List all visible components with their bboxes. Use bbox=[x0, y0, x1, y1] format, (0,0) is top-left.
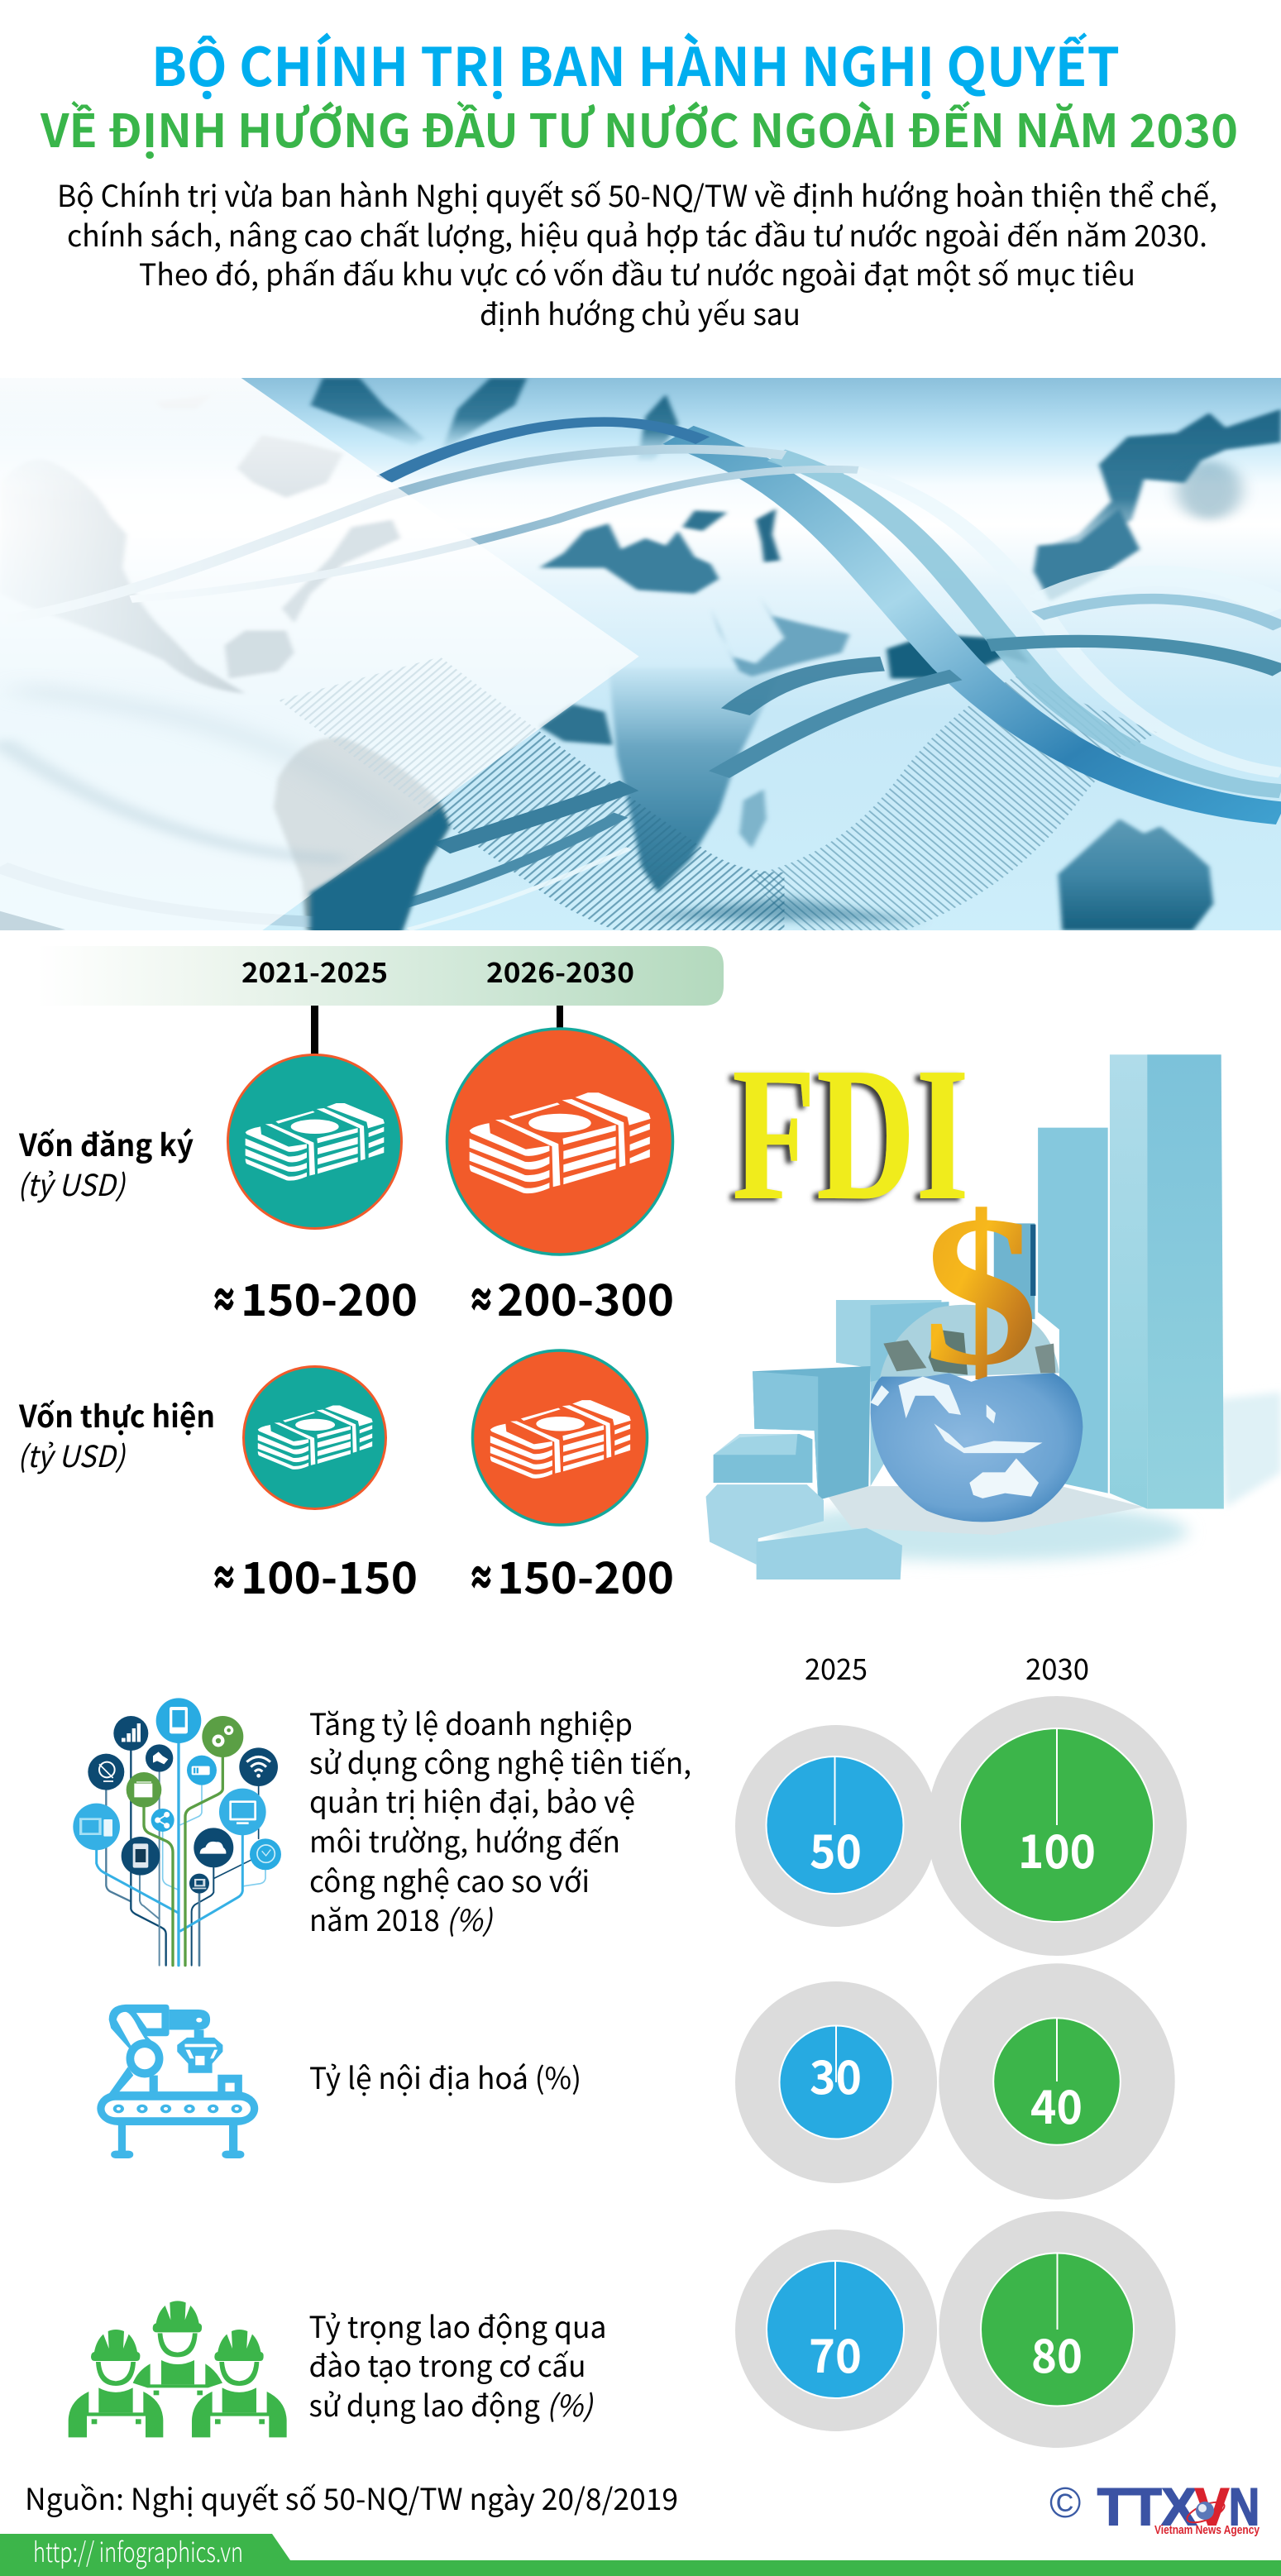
text: technology target: công nghệ cao so với bbox=[309, 1858, 590, 1901]
header band with periods bbox=[37, 946, 724, 1006]
ribbons bbox=[678, 435, 1281, 813]
donut: 50 in 2025 bbox=[735, 1725, 937, 1927]
text: technology target: Tăng tỷ lệ doanh nghiệp bbox=[309, 1701, 633, 1744]
period label 2021-2025: 2021-2025 bbox=[241, 951, 388, 991]
FDI yellow lettering: FDI bbox=[732, 1028, 969, 1240]
logo: TTXVN bbox=[1097, 2478, 1260, 2537]
text: trained labour share: sử dụng lao động (%) bbox=[309, 2382, 594, 2425]
circle: disbursed capital 2021-2025 bbox=[243, 1366, 385, 1508]
donut: 100 in 2030 bbox=[927, 1696, 1187, 1956]
source note: Nguồn: Nghị quyết số 50-NQ/TW ngày 20/8/2019 bbox=[25, 2476, 678, 2519]
white diamond overlay bbox=[0, 372, 639, 937]
footer url: http:// infographics.vn bbox=[33, 2531, 243, 2570]
worker: right bbox=[192, 2330, 287, 2437]
text: trained labour share: đào tạo trong cơ cấu bbox=[309, 2343, 586, 2386]
row label: von dang ky: Vốn đăng ký bbox=[18, 1121, 194, 1165]
text: trained labour share: Tỷ trọng lao động qua bbox=[309, 2304, 607, 2347]
text: localization rate: Tỷ lệ nội địa hoá (%) bbox=[309, 2055, 581, 2098]
title line 1: BỘ CHÍNH TRỊ BAN HÀNH NGHỊ QUYẾT bbox=[151, 26, 1120, 102]
title line 2: VỀ ĐỊNH HƯỚNG ĐẦU TƯ NƯỚC NGOÀI ĐẾN NĂM 2030 bbox=[40, 94, 1238, 160]
donut: 40 in 2030: 40 bbox=[1030, 2071, 1083, 2138]
value: 100-150: ≈ bbox=[212, 1544, 237, 1606]
intro text block bbox=[57, 173, 1217, 334]
soft shadows bbox=[1177, 461, 1242, 520]
value: 150-200: 150-200 bbox=[241, 1266, 418, 1329]
icon: robot arm on conveyor bbox=[97, 2005, 258, 2158]
donut: 30 in 2025 bbox=[735, 1981, 937, 2183]
row label: von thuc hien: Vốn thực hiện bbox=[18, 1392, 215, 1436]
text: technology target: môi trường, hướng đến bbox=[309, 1818, 620, 1862]
floor shadow bbox=[1218, 1393, 1281, 1507]
intro text block: Theo đó, phấn đấu khu vực có vốn đầu tư nước ngoài đạt một số mục tiêu bbox=[139, 251, 1135, 294]
text: technology target bbox=[309, 1701, 691, 1940]
intro text block: định hướng chủ yếu sau bbox=[480, 291, 801, 334]
value: 200-300: 200-300 bbox=[497, 1266, 674, 1329]
hero image: world map with ribbons bbox=[0, 372, 1281, 937]
donut: 100 in 2030: 100 bbox=[1018, 1815, 1096, 1882]
continents bbox=[0, 378, 1281, 930]
logo: TTXVN: N bbox=[1229, 2478, 1259, 2536]
value: 200-300: ≈ bbox=[469, 1266, 494, 1328]
footer band bbox=[0, 2531, 1281, 2576]
bars bbox=[994, 1223, 1035, 1319]
intro text block: chính sách, nâng cao chất lượng, hiệu quả hợp tác đầu tư nước ngoài đến năm 2030. bbox=[67, 213, 1207, 256]
dollar sign: $ bbox=[923, 1171, 1039, 1410]
column label 2025: 2025 bbox=[805, 1646, 868, 1689]
hatched bands bbox=[360, 679, 784, 915]
row label: von thuc hien bbox=[17, 1392, 215, 1476]
donut: 30 in 2025: 30 bbox=[810, 2041, 862, 2108]
icon: three workers bbox=[69, 2301, 287, 2437]
value: 150-200: ≈ bbox=[469, 1544, 494, 1606]
connector 2026-2030 bbox=[557, 1006, 563, 1030]
Africa column bbox=[609, 667, 784, 892]
row label: von dang ky bbox=[17, 1121, 194, 1205]
circle: registered capital 2026-2030 bbox=[447, 1029, 673, 1255]
circle: disbursed capital 2026-2030 bbox=[473, 1350, 647, 1525]
copyright symbol: © bbox=[1049, 2479, 1081, 2527]
row label: von thuc hien: (tỷ USD) bbox=[17, 1433, 127, 1476]
icon: technology tree bbox=[73, 1698, 281, 1966]
logo: TTXVN: TTX bbox=[1097, 2478, 1197, 2536]
icon: money bbox=[490, 1400, 631, 1479]
globe back shell bbox=[880, 1305, 1059, 1379]
icon: money bbox=[246, 1103, 385, 1181]
text: technology target: năm 2018 (%) bbox=[309, 1897, 494, 1940]
connector 2021-2025 bbox=[311, 1006, 318, 1057]
worker: centre bbox=[133, 2301, 222, 2395]
row label: von dang ky: (tỷ USD) bbox=[17, 1162, 127, 1205]
donut: 80 in 2030: 80 bbox=[1031, 2320, 1083, 2387]
intro text block: Bộ Chính trị vừa ban hành Nghị quyết số 50-NQ/TW về định hướng hoàn thiện thể chế, bbox=[57, 173, 1217, 216]
worker: left bbox=[69, 2330, 163, 2437]
circle: registered capital 2021-2025 bbox=[228, 1055, 402, 1229]
icon: money bbox=[470, 1092, 651, 1193]
column label 2030: 2030 bbox=[1025, 1646, 1089, 1689]
donut: 70 in 2025 bbox=[735, 2230, 937, 2431]
value: 150-200: ≈ bbox=[212, 1266, 237, 1328]
donut: 80 in 2030 bbox=[939, 2211, 1176, 2448]
globe front bbox=[871, 1373, 1083, 1522]
text: technology target: sử dụng công nghệ tiên tiến, bbox=[309, 1740, 691, 1783]
donut: 70 in 2025: 70 bbox=[809, 2320, 862, 2387]
text: technology target: quản trị hiện đại, bảo vệ bbox=[309, 1779, 635, 1822]
logo: TTXVN: V bbox=[1195, 2478, 1229, 2536]
donut: 50 in 2025: 50 bbox=[810, 1815, 862, 1882]
period label 2026-2030: 2026-2030 bbox=[486, 951, 634, 991]
donut: 40 in 2030 bbox=[939, 1963, 1175, 2200]
value: 100-150: 100-150 bbox=[241, 1544, 418, 1607]
text: trained labour share bbox=[309, 2304, 607, 2425]
title bbox=[40, 26, 1238, 160]
value: 150-200: 150-200 bbox=[497, 1544, 674, 1607]
FDI illustration bbox=[706, 1028, 1281, 1580]
icon: money bbox=[258, 1406, 373, 1470]
